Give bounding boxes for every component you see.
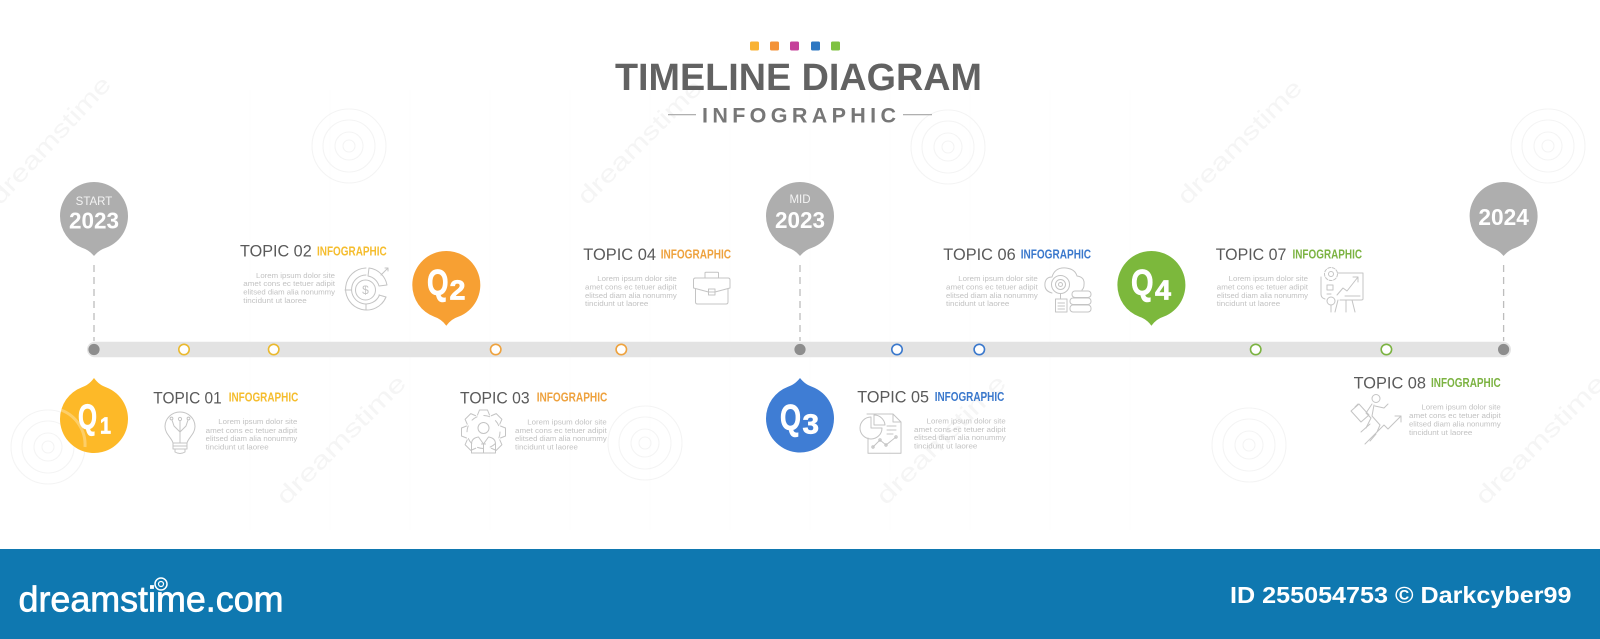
pin: Q2 [412, 251, 480, 326]
topic 02: elitsed diam alia nonummy [243, 288, 335, 296]
icon: report document [860, 414, 901, 453]
pin: Q2: 2 [450, 274, 466, 305]
icon: presentation board [1321, 268, 1363, 312]
pin: start 2023: 2023 [69, 207, 119, 233]
icon: light bulb [165, 412, 195, 454]
watermark layer: dreamstime [1470, 370, 1600, 510]
topic 03: TOPIC 03 [460, 389, 530, 407]
topic 04: Lorem ipsum dolor site [597, 274, 677, 283]
topic 03: Lorem ipsum dolor site [527, 418, 607, 426]
topic 08: elitsed diam alia nonummy [1409, 420, 1501, 428]
pin: Q1: Q [78, 398, 97, 437]
icon: running businessman on rising arrow [1351, 394, 1401, 444]
icon: cloud database [1045, 268, 1091, 312]
topic 01: elitsed diam alia nonummy [206, 434, 298, 443]
topic 08: INFOGRAPHIC [1431, 376, 1501, 390]
topic 03: INFOGRAPHIC [537, 391, 607, 405]
topic 08 [1351, 374, 1502, 444]
pin: mid 2023: MID [789, 194, 811, 206]
topic 06: Lorem ipsum dolor site [958, 274, 1038, 283]
topic 03: amet cons ec tetuer adipit [515, 426, 608, 435]
topic 04: amet cons ec tetuer adipit [585, 282, 678, 292]
timeline bar [87, 342, 1511, 357]
topic 01: TOPIC 01 [153, 389, 222, 407]
pin: start 2023: START [76, 196, 112, 208]
topic 08: tincidunt ut laoree [1409, 428, 1472, 437]
watermark layer [0, 71, 1600, 530]
icon: briefcase [694, 272, 730, 304]
topic 06 [943, 246, 1091, 312]
topic 05: Lorem ipsum dolor site [927, 416, 1006, 426]
title: TIMELINE DIAGRAM [615, 57, 982, 99]
topic 02: TOPIC 02 [240, 243, 312, 261]
pin: mid 2023 [766, 182, 834, 256]
topic 01 [153, 389, 298, 454]
milestone dots on bar [88, 344, 1509, 355]
topic 01: amet cons ec tetuer adipit [206, 426, 298, 435]
topic 07: amet cons ec tetuer adipit [1217, 282, 1309, 292]
topic 05: TOPIC 05 [857, 388, 929, 406]
topic 08: TOPIC 08 [1354, 374, 1426, 392]
topic 07: INFOGRAPHIC [1292, 248, 1362, 262]
footer band [0, 549, 1600, 639]
footer logo: dreamstime.com [18, 579, 284, 620]
pin: start 2023 [60, 182, 128, 256]
topic 06: TOPIC 06 [943, 246, 1016, 264]
pin: Q1: 1 [100, 412, 111, 438]
pin: Q4 [1117, 251, 1185, 326]
watermark layer: dreamstime [1172, 74, 1308, 210]
pin: Q4: Q [1131, 262, 1154, 303]
topic 02: amet cons ec tetuer adipit [243, 279, 336, 288]
pin: mid 2023: 2023 [775, 207, 825, 233]
watermark layer: dreamstime [871, 370, 1012, 510]
topic 03: tincidunt ut laoree [515, 442, 578, 452]
pin: 2024: 2024 [1478, 204, 1529, 230]
icon: dollar target [345, 268, 388, 310]
topic 02: INFOGRAPHIC [317, 244, 387, 258]
watermark layer: dreamstime [271, 370, 412, 510]
topic 01: INFOGRAPHIC [229, 391, 298, 405]
topic 04: INFOGRAPHIC [661, 248, 731, 262]
topic 07: Lorem ipsum dolor site [1229, 274, 1308, 283]
topic 07: TOPIC 07 [1216, 246, 1286, 264]
topic 07: elitsed diam alia nonummy [1217, 291, 1308, 300]
pin: 2024 [1470, 182, 1538, 256]
topic 02: tincidunt ut laoree [243, 296, 307, 305]
topic 06: INFOGRAPHIC [1021, 248, 1091, 262]
footer credit: ID 255054753 © Darkcyber99 [1230, 582, 1572, 608]
topic 06: amet cons ec tetuer adipit [946, 282, 1039, 292]
pin: Q3: Q [780, 397, 801, 438]
pin: Q4: 4 [1155, 274, 1171, 305]
icon: gear with person [462, 410, 506, 453]
topic 08: amet cons ec tetuer adipit [1409, 411, 1502, 420]
topic 04: TOPIC 04 [583, 246, 656, 264]
pin: Q3 [766, 378, 834, 453]
topic 03: elitsed diam alia nonummy [515, 434, 607, 443]
topic 04: elitsed diam alia nonummy [585, 291, 677, 300]
icon: dollar target: $ [362, 283, 369, 297]
topic 01: Lorem ipsum dolor site [218, 417, 297, 426]
topic 06: elitsed diam alia nonummy [946, 291, 1038, 300]
colour squares [750, 42, 840, 50]
topic 03 [460, 389, 608, 453]
pin: Q3: 3 [802, 408, 819, 440]
topic 07 [1216, 246, 1363, 312]
topic 04: tincidunt ut laoree [585, 299, 648, 308]
topic 05: elitsed diam alia nonummy [914, 433, 1006, 442]
topic 04 [583, 246, 731, 308]
topic 05: tincidunt ut laoree [914, 442, 977, 450]
topic 05 [857, 388, 1007, 453]
topic 02 [240, 243, 388, 310]
topic 02: Lorem ipsum dolor site [256, 271, 335, 280]
topic 05: INFOGRAPHIC [935, 390, 1004, 404]
topic 07: tincidunt ut laoree [1217, 299, 1280, 308]
topic 05: amet cons ec tetuer adipit [914, 425, 1007, 434]
topic 06: tincidunt ut laoree [946, 299, 1009, 308]
pin: Q1 [60, 378, 128, 453]
dashed connectors [94, 265, 1504, 341]
watermark layer: dreamstime [572, 74, 708, 210]
subtitle: INFOGRAPHIC [702, 103, 896, 127]
pin: Q2: Q [427, 262, 448, 303]
topic 08: Lorem ipsum dolor site [1421, 402, 1501, 412]
topic 01: tincidunt ut laoree [206, 442, 269, 452]
